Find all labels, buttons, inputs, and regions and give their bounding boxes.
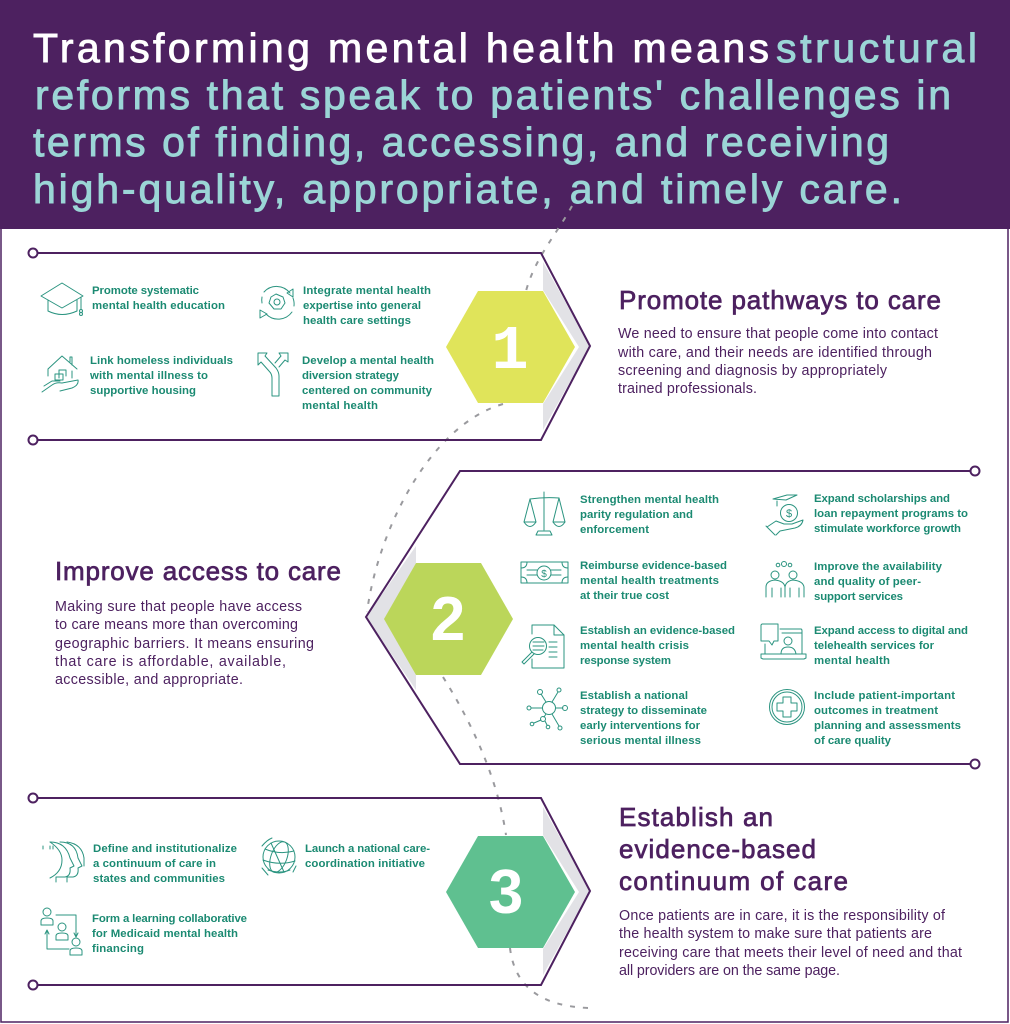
title: terms of finding, accessing, and receiving: [33, 119, 889, 165]
item: parity: parity regulation and: [580, 509, 693, 521]
item: crisis response: Establish an evidence-based: [580, 625, 735, 637]
item: learning collaborative: for Medicaid mental health: [92, 928, 238, 940]
item: national strategy: early interventions for: [580, 720, 701, 732]
body 3: receiving care that meets their level of need and that: [619, 945, 962, 961]
item: scholarships: loan repayment programs to: [814, 508, 968, 520]
icon: document magnifier: [522, 625, 564, 668]
header band: [0, 0, 1010, 229]
title: structural: [776, 25, 977, 71]
heading 3: continuum of care: [619, 866, 848, 896]
item: reimburse: at their true cost: [580, 590, 669, 602]
item: national strategy: strategy to disseminate: [580, 705, 707, 717]
hexagon 3: 3: [489, 858, 523, 927]
title: Transforming mental health means: [33, 25, 769, 71]
item: patient outcomes: outcomes in treatment: [814, 705, 938, 717]
item: telehealth: telehealth services for: [814, 640, 935, 652]
item: diversion strategy: mental health: [302, 400, 378, 412]
body 1: We need to ensure that people come into contact: [618, 326, 938, 342]
item: national strategy: serious mental illness: [580, 735, 701, 747]
item: homeless housing: supportive housing: [90, 385, 196, 397]
item: telehealth: [814, 625, 968, 667]
item: reimburse: Reimburse evidence-based: [580, 560, 727, 572]
item: peer support: [814, 561, 943, 603]
body 2: that care is affordable, available,: [55, 654, 286, 670]
panel 3: continuum of care: [28, 794, 590, 990]
item: scholarships: [814, 493, 968, 535]
hexagon 1: 1: [491, 316, 529, 387]
item: national strategy: Establish a national: [580, 690, 688, 702]
icon: peers: [766, 562, 804, 597]
heading 3: [619, 802, 848, 896]
icon: banknote: [521, 562, 568, 583]
heading 1: Promote pathways to care: [619, 285, 941, 315]
panel 3 chevron outline: [28, 794, 590, 990]
icon: telehealth laptop: [761, 624, 806, 659]
body 2: geographic barriers. It means ensuring: [55, 636, 314, 652]
item: care coordination: Launch a national care-: [305, 843, 430, 855]
item: systematic education: Promote systematic: [92, 285, 199, 297]
item: patient outcomes: planning and assessments: [814, 720, 961, 732]
item: systematic education: mental health education: [92, 300, 225, 312]
title: [33, 25, 977, 212]
body 2: [55, 599, 314, 688]
icon: diverging arrows: [258, 353, 288, 396]
item: parity: [580, 494, 719, 536]
hexagon 2: 2: [431, 585, 465, 654]
icon: graduation cap: [41, 283, 83, 316]
item: diversion strategy: Develop a mental health: [302, 355, 434, 367]
panel 1: promote pathways: [28, 248, 590, 444]
item: integrate expertise: [303, 285, 431, 327]
hexagon 2: [384, 563, 513, 675]
item: telehealth: mental health: [814, 655, 890, 667]
item: crisis response: response system: [580, 655, 671, 667]
item: diversion strategy: diversion strategy: [302, 370, 400, 382]
item: integrate expertise: Integrate mental health: [303, 285, 431, 297]
section 3 text: [619, 802, 962, 979]
hexagon 1: [446, 291, 575, 403]
section 1 text: [617, 285, 941, 397]
item: integrate expertise: health care settings: [303, 315, 411, 327]
item: national strategy: [580, 690, 707, 747]
item: telehealth: Expand access to digital and: [814, 625, 968, 637]
item: peer support: and quality of peer-: [814, 576, 921, 588]
icon: banknote: $: [541, 569, 547, 580]
dashed connector path: [367, 206, 588, 1008]
icon: network: [527, 688, 568, 730]
item: homeless housing: with mental illness to: [89, 370, 208, 382]
heading 3: evidence-based: [619, 834, 816, 864]
title: high-quality, appropriate, and timely care.: [33, 166, 902, 212]
item: homeless housing: [89, 355, 233, 397]
item: homeless housing: Link homeless individuals: [90, 355, 233, 367]
heading 2: Improve access to care: [55, 556, 341, 586]
item: define continuum: [93, 843, 237, 885]
item: scholarships: Expand scholarships and: [814, 493, 950, 505]
icon: cycle: [260, 286, 294, 319]
item: diversion strategy: centered on community: [302, 385, 433, 397]
item: define continuum: states and communities: [93, 873, 225, 885]
icon: scholarship hand: $: [786, 508, 792, 520]
item: scholarships: stimulate workforce growth: [814, 523, 961, 535]
body 3: all providers are on the same page.: [619, 963, 840, 979]
body 3: Once patients are in care, it is the responsibility of: [619, 908, 945, 924]
panel 2: improve access: [366, 466, 980, 768]
item: reimburse: [580, 560, 727, 602]
item: define continuum: Define and institutionalize: [93, 843, 237, 855]
icon: scales: [524, 492, 565, 535]
item: care coordination: [305, 843, 430, 870]
body 1: [617, 326, 938, 397]
item: systematic education: [92, 285, 225, 312]
body 2: accessible, and appropriate.: [55, 672, 243, 688]
body 2: Making sure that people have access: [55, 599, 302, 615]
icon: house in hand: [42, 356, 78, 392]
icon: learning collaborative: [41, 908, 82, 955]
item: patient outcomes: [814, 690, 961, 747]
item: define continuum: a continuum of care in: [93, 858, 216, 870]
hexagon 3: [446, 836, 575, 948]
icon: faces: [43, 842, 84, 882]
item: patient outcomes: of care quality: [814, 735, 892, 747]
item: learning collaborative: Form a learning collaborative: [92, 913, 247, 925]
panel 2 chevron outline: [366, 466, 980, 768]
body 1: with care, and their needs are identified through: [617, 345, 932, 361]
heading 3: Establish an: [619, 802, 773, 832]
item: integrate expertise: expertise into general: [303, 300, 421, 312]
body 2: to care means more than overcoming: [55, 617, 298, 633]
title: reforms that speak to patients' challenges in: [35, 72, 951, 118]
body 3: [619, 908, 962, 979]
body 1: trained professionals.: [618, 381, 757, 397]
body 1: screening and diagnosis by appropriately: [618, 363, 888, 379]
section 2 text: [55, 556, 341, 688]
item: parity: Strengthen mental health: [580, 494, 719, 506]
item: crisis response: mental health crisis: [580, 640, 689, 652]
item: peer support: Improve the availability: [814, 561, 943, 573]
item: care coordination: coordination initiative: [305, 858, 425, 870]
icon: medical cross: [770, 690, 804, 724]
item: patient outcomes: Include patient-important: [814, 690, 955, 702]
icon: globe: [262, 838, 296, 875]
item: reimburse: mental health treatments: [580, 575, 719, 587]
item: diversion strategy: [302, 355, 434, 412]
item: peer support: support services: [814, 591, 903, 603]
item: learning collaborative: [92, 913, 247, 955]
item: crisis response: [580, 625, 735, 667]
icon: scholarship hand: [766, 495, 803, 535]
item: parity: enforcement: [580, 524, 649, 536]
item: learning collaborative: financing: [92, 943, 144, 955]
panel 1 chevron outline: [28, 248, 590, 444]
body 3: the health system to make sure that patients are: [619, 926, 932, 942]
